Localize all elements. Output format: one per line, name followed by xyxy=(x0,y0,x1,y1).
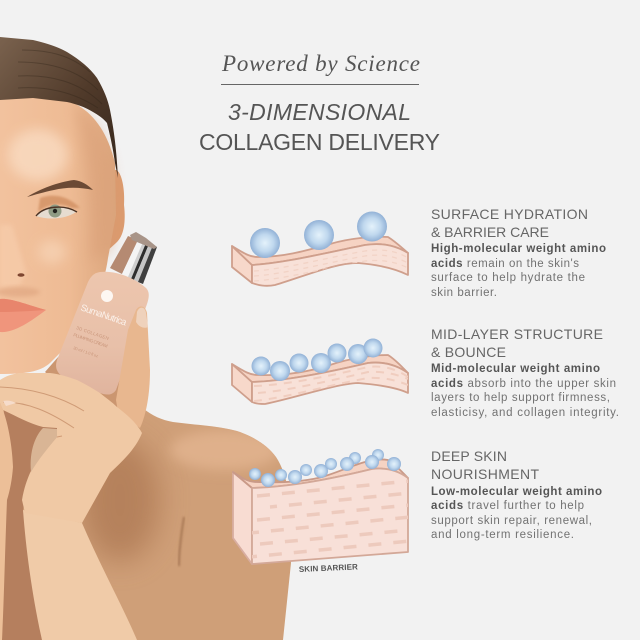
diagram: deep skin nourishment xyxy=(233,449,410,564)
section description: acids travel further to help xyxy=(431,500,584,512)
text block: deep skin nourishment xyxy=(431,448,602,541)
section heading: & BOUNCE xyxy=(431,344,506,360)
section description: acids absorb into the upper skin xyxy=(431,378,616,390)
nostril xyxy=(18,273,24,277)
armpit crease xyxy=(179,517,184,566)
finger creases xyxy=(0,387,84,437)
hand xyxy=(0,373,142,523)
bottle: 3D COLLAGEN xyxy=(76,325,109,341)
section description: Low-molecular weight amino xyxy=(431,486,602,498)
ear xyxy=(106,170,125,252)
forearm xyxy=(23,510,137,640)
section description: surface to help hydrate the xyxy=(431,272,585,284)
section heading xyxy=(431,448,539,482)
diagram: mid-layer structure xyxy=(232,338,408,404)
section description xyxy=(431,363,619,419)
section heading xyxy=(431,206,588,240)
bottle label: SumaNutrica xyxy=(79,302,129,329)
low-molecular spheres xyxy=(249,449,401,487)
section heading: NOURISHMENT xyxy=(431,466,539,482)
section description: Mid-molecular weight amino xyxy=(431,363,600,375)
section description: skin barrier. xyxy=(431,287,497,299)
section heading: DEEP SKIN xyxy=(431,448,507,464)
bottle cap xyxy=(110,232,157,284)
skin top xyxy=(232,237,408,265)
section description: acids remain on the skin's xyxy=(431,258,579,270)
section description xyxy=(431,243,606,299)
high-molecular spheres xyxy=(250,212,387,258)
section description: High-molecular weight amino xyxy=(431,243,606,255)
bottle xyxy=(56,232,157,395)
finger nail xyxy=(3,401,16,406)
heading: powered by science: Powered by Science xyxy=(221,51,420,76)
section heading xyxy=(431,326,603,360)
face xyxy=(0,92,116,374)
hair xyxy=(0,37,118,178)
title xyxy=(199,51,440,155)
section description xyxy=(431,486,602,541)
skin front xyxy=(252,363,408,404)
shadow behind arm xyxy=(2,410,60,640)
lips xyxy=(0,299,46,332)
eye xyxy=(36,196,80,219)
section description: layers to help support firmness, xyxy=(431,392,610,404)
section heading: MID-LAYER STRUCTURE xyxy=(431,326,603,342)
skin side xyxy=(232,246,252,283)
bottle body xyxy=(56,272,149,395)
model with serum bottle xyxy=(0,37,300,640)
bottle: PLUMPING CREAM xyxy=(73,332,109,349)
skin top xyxy=(232,355,408,382)
forehead shading and shine xyxy=(72,105,114,262)
thumb nail xyxy=(136,308,148,328)
section description: and long-term resilience. xyxy=(431,529,574,541)
section heading: SURFACE HYDRATION xyxy=(431,206,588,222)
skin front xyxy=(252,244,408,286)
bottle: 30 ml / 1.0 fl oz xyxy=(73,345,99,358)
palm shadow xyxy=(31,428,57,472)
heading: collagen delivery: COLLAGEN DELIVERY xyxy=(199,129,440,155)
thumb xyxy=(116,307,150,428)
section heading: & BARRIER CARE xyxy=(431,224,549,240)
skin side xyxy=(232,364,252,402)
diagram: surface hydration xyxy=(232,212,408,286)
skin side xyxy=(233,472,252,564)
neck xyxy=(45,300,143,420)
skin front xyxy=(252,469,408,564)
heading: 3-dimensional: 3-DIMENSIONAL xyxy=(228,99,411,125)
text block: mid-layer structure xyxy=(431,326,619,419)
text block: surface hydration xyxy=(431,206,606,299)
skin barrier label: SKIN BARRIER xyxy=(299,562,358,574)
section description: support skin repair, renewal, xyxy=(431,515,592,527)
bottle logo xyxy=(101,290,113,302)
skin top xyxy=(233,459,408,488)
left arm edge xyxy=(0,403,13,640)
mid-molecular spheres xyxy=(252,338,382,381)
torso and shoulder xyxy=(0,400,300,640)
eyebrow xyxy=(27,180,93,197)
section description: elasticisy, and collagen integrity. xyxy=(431,407,619,419)
